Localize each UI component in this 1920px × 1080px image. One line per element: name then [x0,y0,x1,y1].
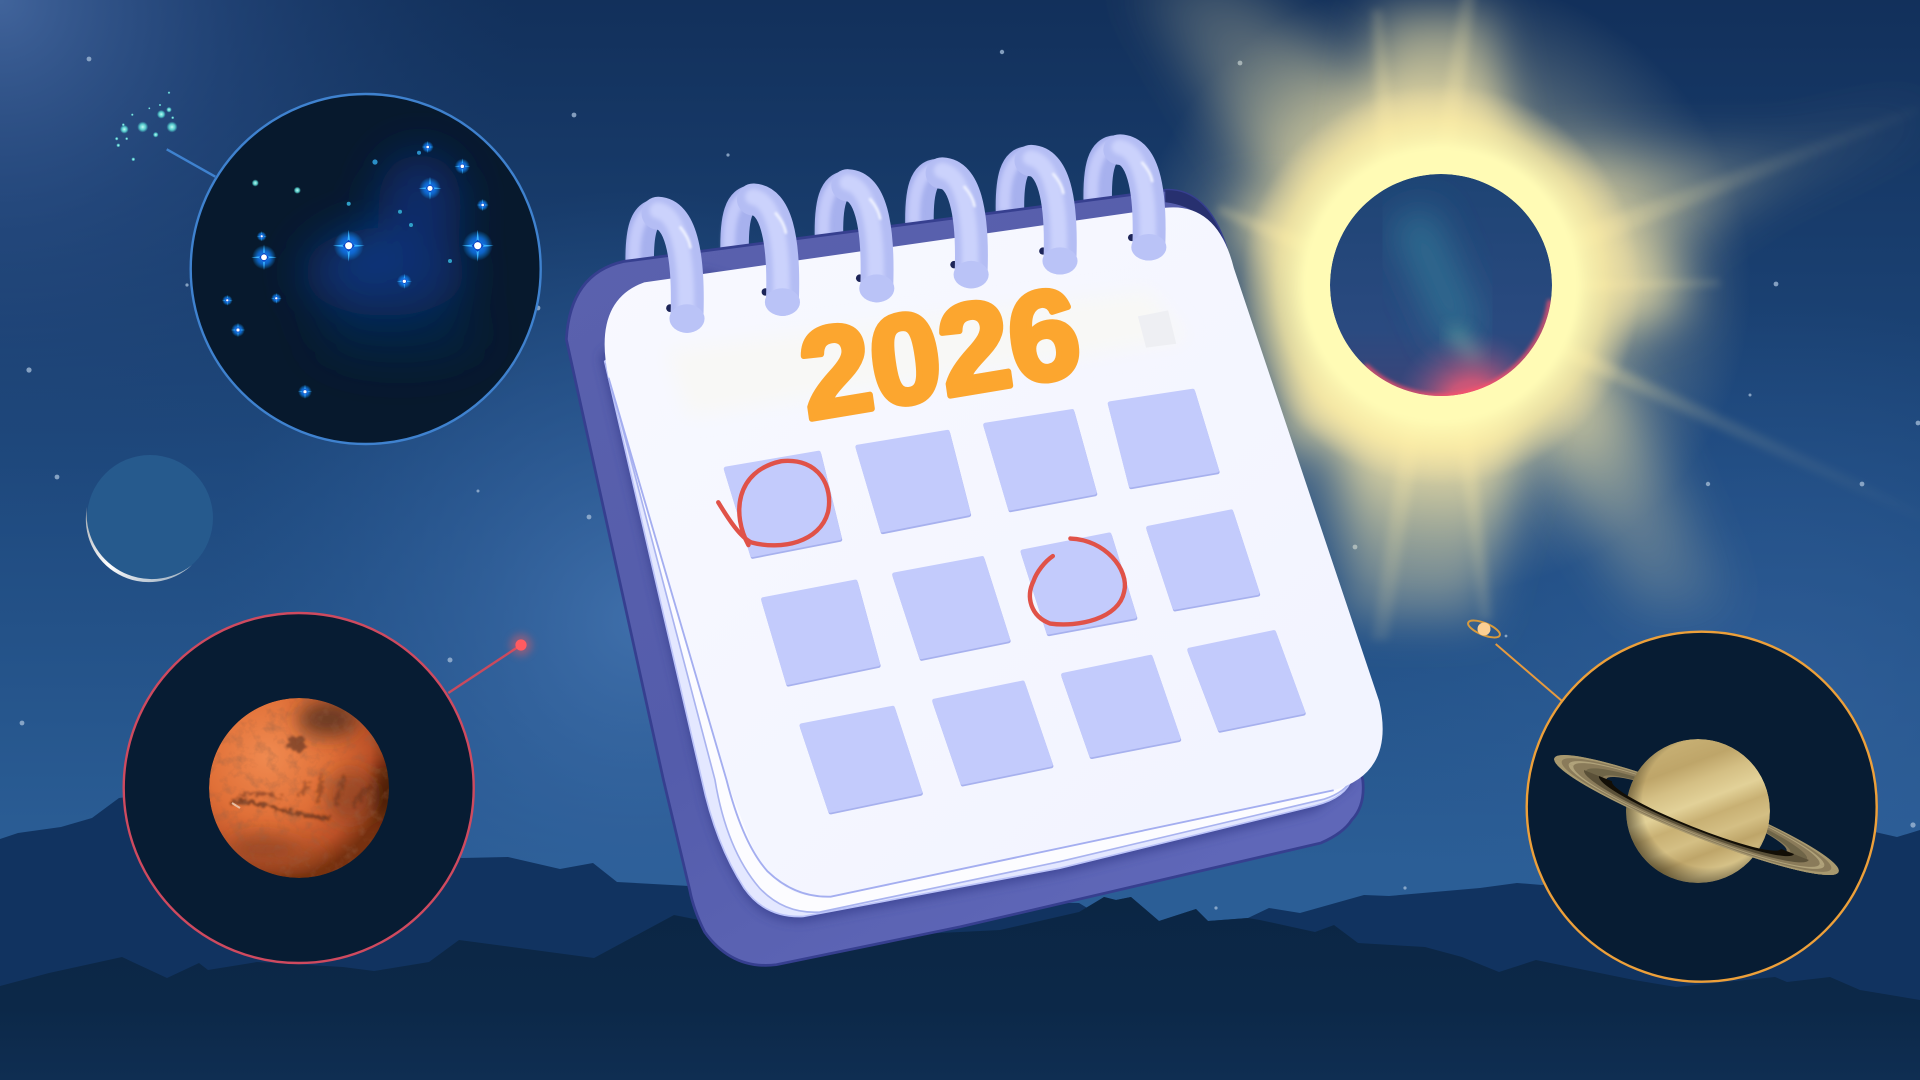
callout line to Mars dot [448,645,521,693]
panel: Mars close-up [124,613,532,963]
calendar illustration [566,144,1383,965]
corona glow [1241,85,1641,485]
back mountain range [0,790,1920,1080]
callout line to Saturn marker [1496,644,1562,701]
faint smudge behind year [666,290,1187,416]
cover top dark edge [1165,190,1270,411]
planet Saturn [1551,739,1842,889]
circle frame [124,613,474,963]
globe [1626,739,1770,883]
page drop shadow on cover [600,271,1352,922]
crescent moon [86,455,213,582]
rings front half [1554,758,1838,875]
panel: Saturn close-up [1466,617,1877,982]
rings back half [1551,741,1842,889]
red hand-drawn circle: second date [1030,539,1125,624]
cluster stars [222,141,494,399]
circle frame [1527,632,1877,982]
total solar eclipse [1130,0,1920,640]
red hand-drawn circle: first date [718,461,829,545]
background stars [20,50,1920,910]
planet Mars [209,698,395,878]
date grid [726,391,1303,811]
small Saturn marker [1466,617,1502,641]
front mountain range [0,897,1920,1080]
under sheets [605,285,1352,917]
calendar cover [566,190,1363,965]
Mars dot [510,634,532,656]
year 2026: 2026 [792,260,1088,446]
circle frame [191,94,541,444]
callout line [167,149,215,177]
corona rays [1130,0,1920,640]
nebula [303,153,485,363]
small Pleiades marker [115,91,178,161]
top page [605,207,1383,897]
top page edge line [609,378,1334,897]
moon disc [1330,174,1552,396]
spiral ring front parts [658,147,1166,333]
spiral ring back parts [634,144,1116,268]
date grid shadow [726,393,1304,812]
panel: Pleiades cluster close-up [115,91,541,444]
